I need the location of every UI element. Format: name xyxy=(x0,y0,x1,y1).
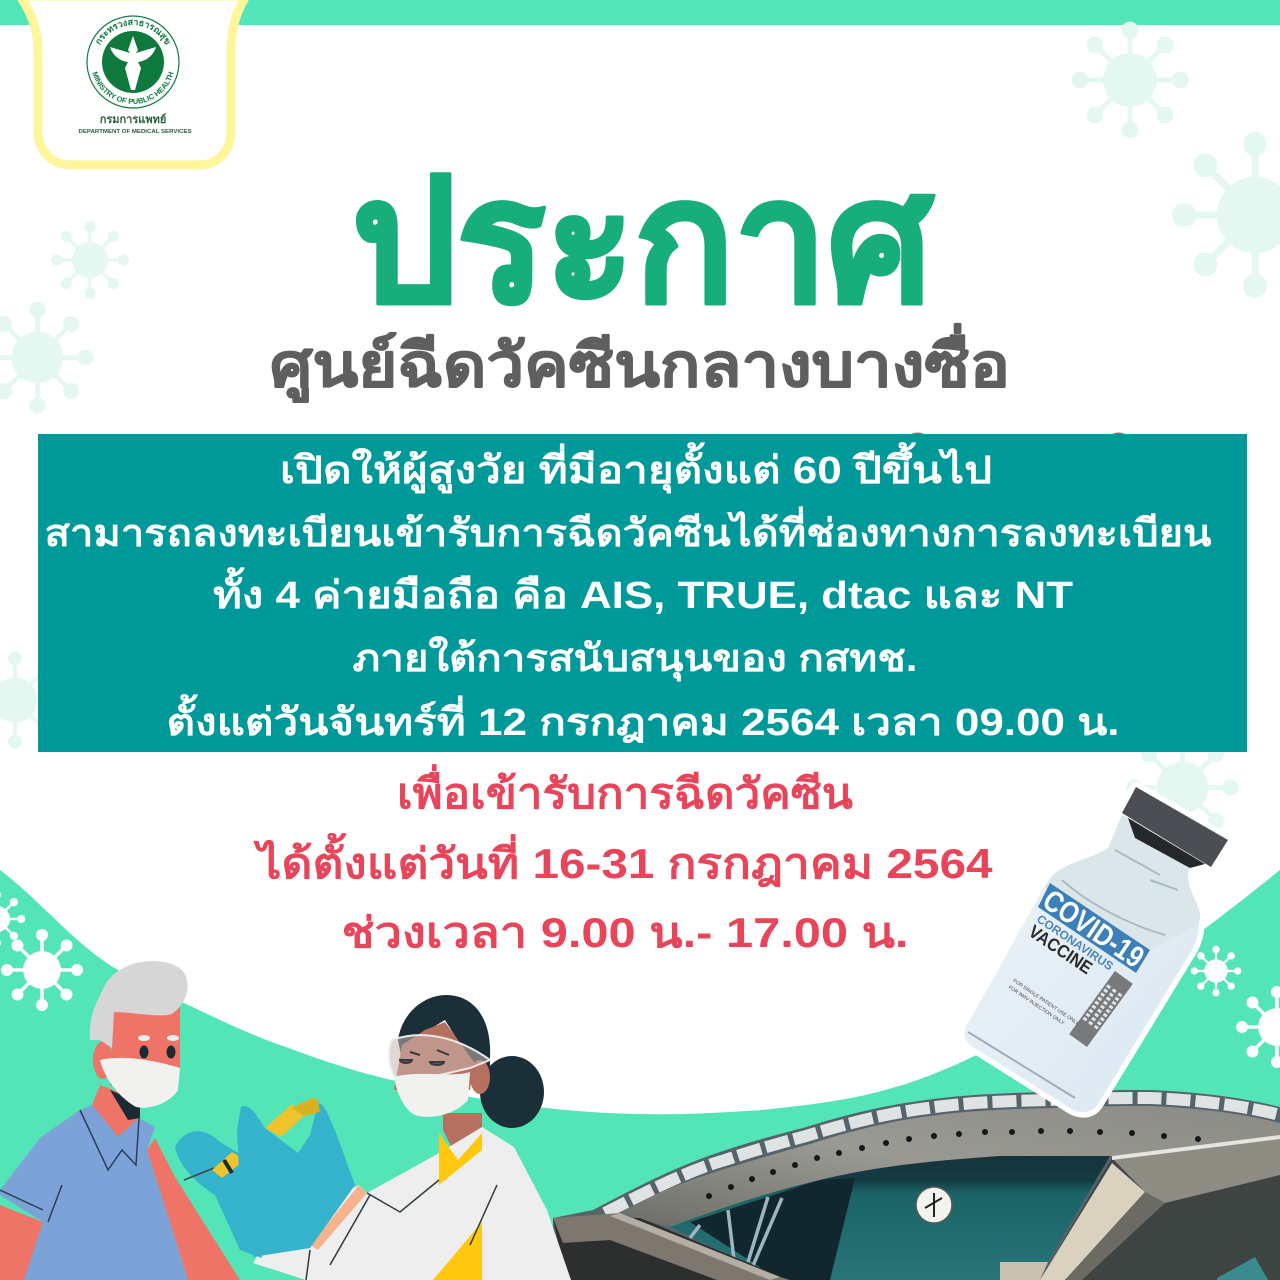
right dark wall xyxy=(1040,1137,1280,1280)
teal windows xyxy=(670,1156,1110,1280)
vial label text xyxy=(995,912,1120,1034)
hidden red text remnants xyxy=(911,432,1125,434)
vial barcode xyxy=(1069,971,1133,1047)
cream panel xyxy=(1040,1163,1145,1280)
back hand glove xyxy=(175,1131,262,1258)
front hand glove xyxy=(237,1103,355,1257)
man arm right xyxy=(147,1138,240,1280)
man neck shadow xyxy=(110,1090,140,1120)
vial label text: CORONAVIRUS xyxy=(1034,912,1116,973)
man shirt xyxy=(0,1105,188,1280)
bottom green wave xyxy=(0,870,1280,1280)
nurse hair xyxy=(398,995,490,1073)
logo frame xyxy=(17,0,249,170)
notice line 1: เปิดให้ผู้สูงวัย ที่มีอายุตั้งแต่ 60 ปีขึ้นไป xyxy=(280,442,992,494)
nurse face xyxy=(394,1022,474,1090)
left beam xyxy=(553,1213,790,1280)
pale virus decorations xyxy=(0,24,1280,841)
vial label text: FOR IM/IV INJECTION ONLY xyxy=(1007,985,1066,1027)
vial base shadow xyxy=(968,1032,1075,1098)
dark window frame area xyxy=(690,1178,855,1280)
red text block xyxy=(253,764,993,956)
logo: Ministry of Public Health seal: MINISTRY OF PUBLIC HEALTH xyxy=(92,72,174,104)
white viruses on green xyxy=(0,892,1280,1083)
logo: Ministry of Public Health seal: DEPARTMENT OF MEDICAL SERVICES xyxy=(78,129,192,135)
window struts xyxy=(690,1197,782,1268)
notice line 3: ทั้ง 4 ค่ายมือถือ คือ AIS, TRUE, dtac และ NT xyxy=(213,567,1073,617)
logo: Ministry of Public Health seal: กระทรวงสาธารณสุข xyxy=(96,19,170,45)
Bang Sue station building xyxy=(553,1090,1280,1280)
notice line 5: ตั้งแต่วันจันทร์ที่ 12 กรกฎาคม 2564 เวลา 09.00 น. xyxy=(166,694,1120,744)
man ear xyxy=(93,1041,113,1079)
roof strip base xyxy=(553,1090,1280,1280)
logo caption: กรมการแพทย์ xyxy=(100,113,166,126)
illustration: elderly man xyxy=(0,961,240,1280)
clock xyxy=(916,1187,952,1223)
left beam shadow xyxy=(553,1218,790,1280)
nurse eyes xyxy=(400,1050,449,1065)
vaccine vial xyxy=(964,787,1228,1112)
nurse goggles xyxy=(389,1035,490,1077)
vial neck reflections xyxy=(1062,850,1178,935)
top green bar xyxy=(0,0,1280,25)
syringe needle and body xyxy=(184,1152,245,1180)
nurse neck xyxy=(443,1113,482,1160)
nurse shirt xyxy=(439,1133,482,1185)
man eyebrows xyxy=(138,1035,150,1041)
man arm left xyxy=(0,1205,43,1280)
vial seal xyxy=(1128,818,1205,868)
vial body xyxy=(964,815,1200,1112)
glass shoulder xyxy=(1045,815,1200,950)
illustration: nurse xyxy=(175,995,571,1280)
man neck xyxy=(92,1085,139,1137)
title: ประกาศ xyxy=(352,146,935,338)
nurse ear xyxy=(470,1060,490,1094)
man hair xyxy=(90,961,188,1048)
grey strip xyxy=(1065,1192,1165,1280)
man mask xyxy=(100,1058,180,1108)
notice line 4: ภายใต้การสนับสนุนของ กสทช. xyxy=(352,636,918,682)
vial label text: VACCINE xyxy=(1025,921,1096,978)
man face xyxy=(110,1005,180,1100)
subtitle: ศูนย์ฉีดวัคซีนกลางบางซื่อ xyxy=(270,323,1010,403)
nurse coat lines xyxy=(306,1180,497,1280)
red line 1: เพื่อเข้ารับการฉีดวัคซีน xyxy=(397,764,853,817)
window ledge xyxy=(1000,1262,1048,1280)
nurse bun xyxy=(480,1056,544,1128)
blue label band: COVID-19 xyxy=(1037,884,1150,975)
nurse sleeve cuff xyxy=(310,1185,367,1250)
roof band xyxy=(620,1106,1280,1227)
syringe barrel xyxy=(265,1098,320,1137)
bright reflection xyxy=(1217,1257,1268,1280)
vial label text: FOR SINGLE PATIENT USE ONLY xyxy=(1012,978,1080,1027)
logo: Ministry of Public Health seal xyxy=(78,15,192,135)
teal notice panel xyxy=(38,434,1247,752)
man eyes xyxy=(140,1046,148,1058)
notice line 2: สามารถลงทะเบียนเข้ารับการฉีดวัคซีนได้ที่ช่องทางการลงทะเบียน xyxy=(44,506,1212,555)
roof slats xyxy=(605,1098,1280,1213)
nurse mask xyxy=(394,1072,470,1117)
man collar xyxy=(0,1110,139,1222)
grey wall xyxy=(1112,1137,1280,1203)
red line 2: ได้ตั้งแต่วันที่ 16-31 กรกฎาคม 2564 xyxy=(253,832,993,887)
nurse coat xyxy=(253,1127,571,1280)
vial cap xyxy=(1122,787,1228,867)
band holes xyxy=(706,1128,1201,1199)
red line 3: ช่วงเวลา 9.00 น.- 17.00 น. xyxy=(342,909,908,956)
